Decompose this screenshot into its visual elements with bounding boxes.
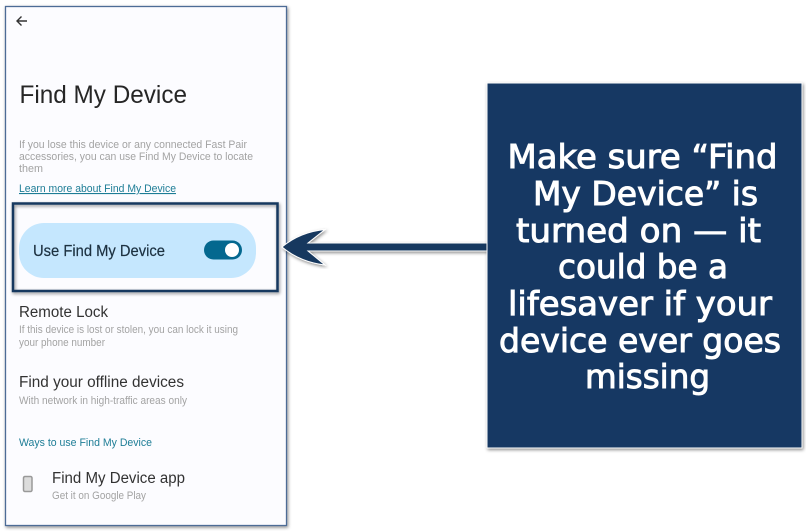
item: find my device app: Get it on Google Play bbox=[52, 490, 146, 502]
setting: remote lock: If this device is lost or stolen, you can lock it using bbox=[19, 324, 238, 336]
setting: use find my device toggle row bbox=[19, 223, 256, 278]
section label: ways to use: Ways to use Find My Device bbox=[19, 437, 152, 449]
arrow bbox=[282, 230, 488, 265]
callout text: lifesaver if your bbox=[508, 284, 772, 323]
setting: find your offline devices: Find your offline devices bbox=[19, 374, 184, 391]
panel: phone screenshot bbox=[6, 6, 286, 526]
setting: use find my device toggle row: Use Find My Device bbox=[33, 243, 165, 260]
text block: description bbox=[19, 139, 253, 175]
callout text: missing bbox=[585, 357, 710, 396]
icon: back arrow bbox=[17, 16, 27, 26]
highlight box bbox=[13, 204, 278, 291]
setting: find your offline devices: With network in high-traffic areas only bbox=[19, 395, 187, 407]
callout text: device ever goes bbox=[499, 321, 781, 360]
panel: callout bbox=[487, 83, 802, 448]
text block: description: them bbox=[19, 163, 43, 175]
item: find my device app bbox=[52, 470, 185, 502]
setting: remote lock: Remote Lock bbox=[19, 304, 108, 321]
icon: phone bbox=[24, 476, 32, 492]
text block: description: accessories, you can use Find My Device to locate bbox=[19, 151, 253, 163]
icon: toggle switch bbox=[204, 240, 242, 260]
heading: Find My Device: Find My Device bbox=[20, 81, 187, 109]
link: learn more: Learn more about Find My Device bbox=[19, 183, 176, 195]
callout text: could be a bbox=[558, 247, 728, 286]
callout text: turned on — it bbox=[516, 211, 761, 250]
text block: description: If you lose this device or any connected Fast Pair bbox=[19, 139, 247, 151]
callout text: My Device” is bbox=[533, 174, 758, 213]
setting: find your offline devices bbox=[19, 374, 187, 407]
setting: remote lock: your phone number bbox=[19, 337, 105, 349]
item: find my device app: Find My Device app bbox=[52, 470, 185, 487]
callout text: Make sure “Find bbox=[508, 137, 778, 176]
callout text bbox=[499, 137, 781, 396]
setting: remote lock bbox=[19, 304, 238, 349]
